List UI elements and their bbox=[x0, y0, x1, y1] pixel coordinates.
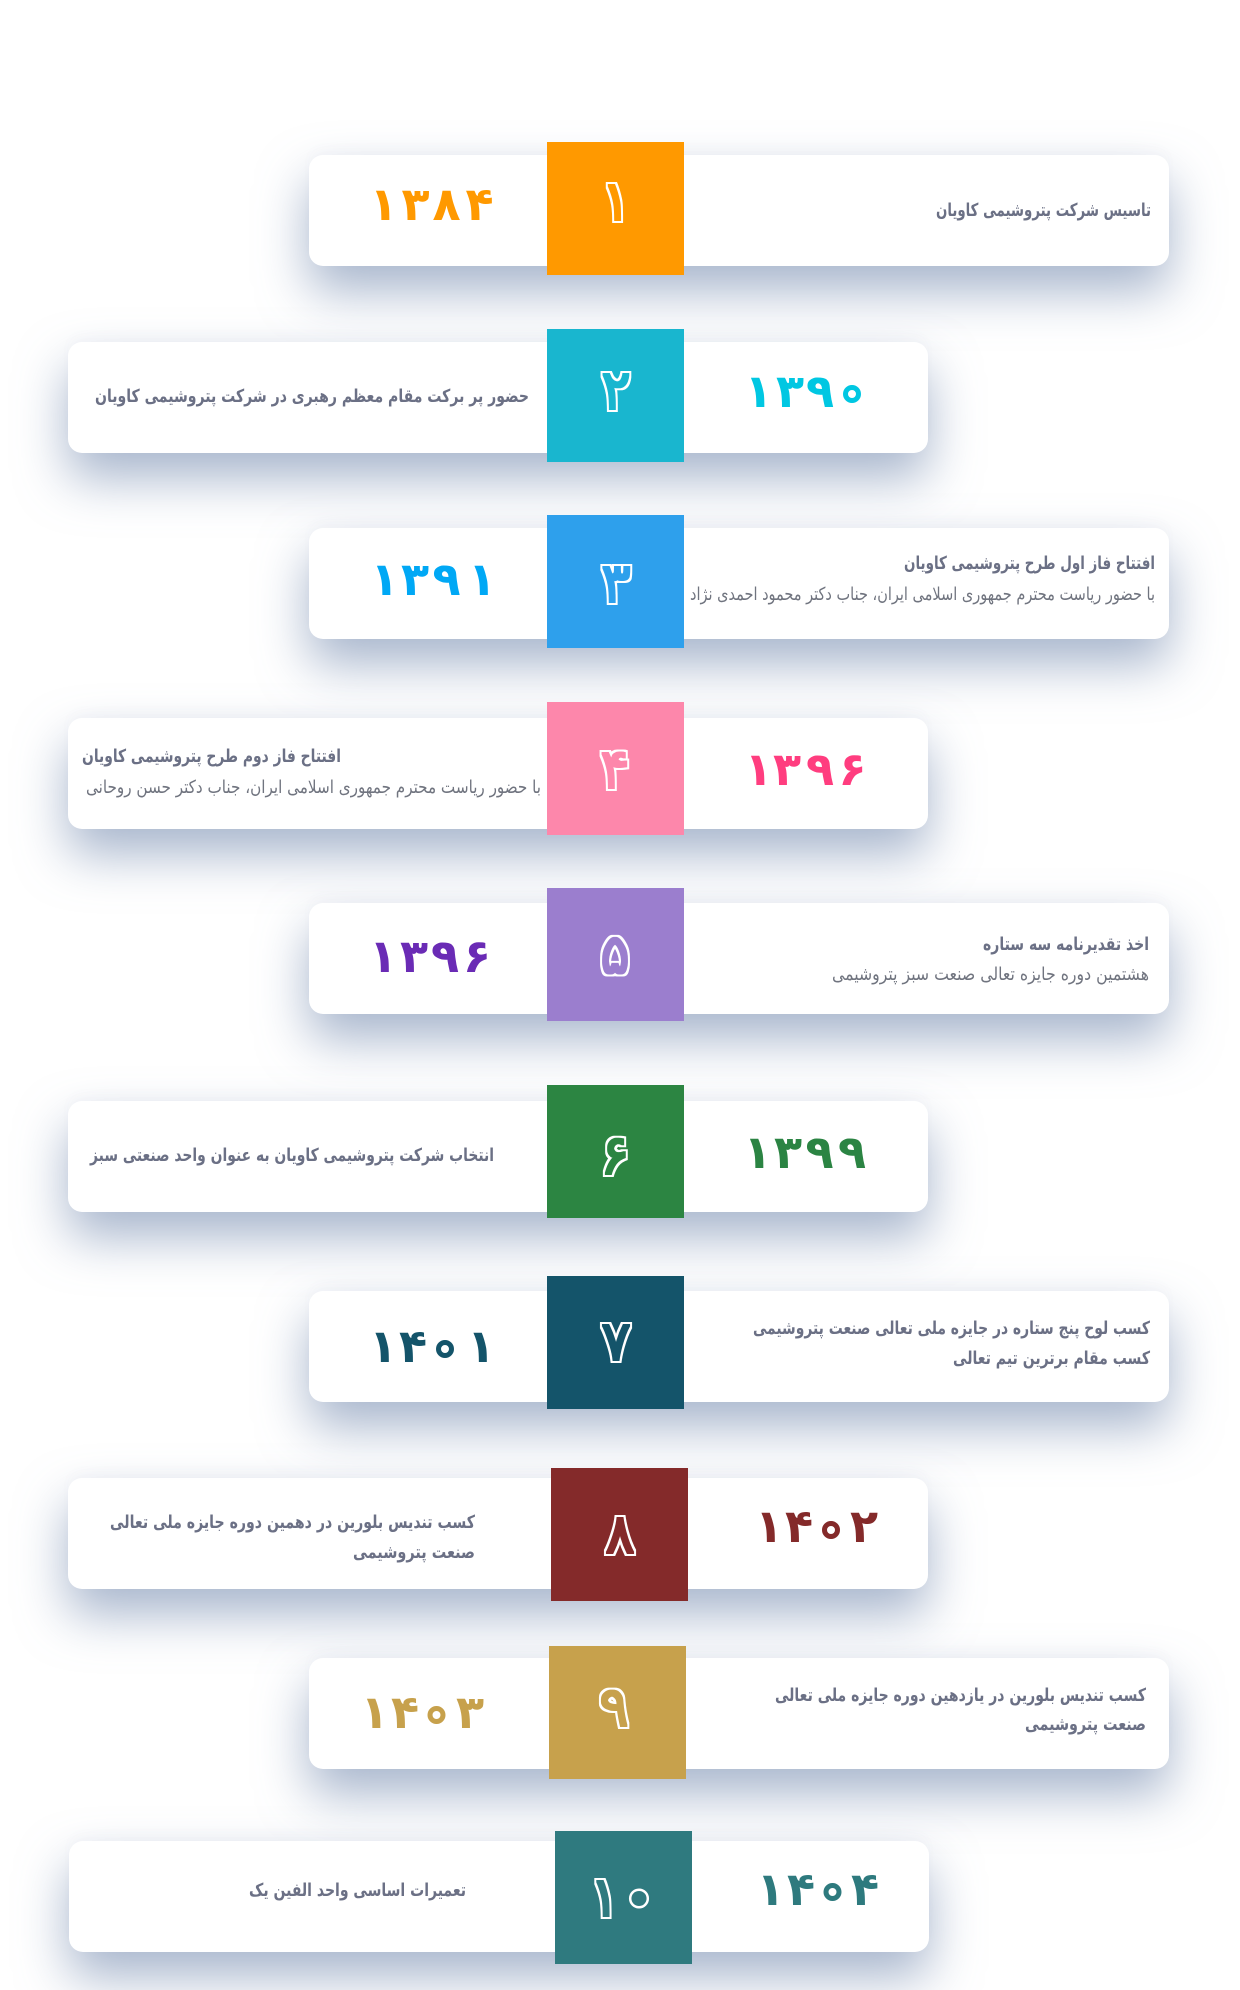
year: ۱۳۸۴ bbox=[369, 177, 494, 231]
outlined number: ۶ bbox=[600, 1123, 630, 1187]
outlined number: ۸ bbox=[605, 1502, 635, 1566]
year: ۱۳۹۶ bbox=[369, 929, 491, 983]
number square bbox=[547, 1085, 684, 1218]
card bbox=[68, 1478, 928, 1589]
row 4: 1396 phase two bbox=[36, 702, 960, 886]
number square bbox=[547, 329, 684, 462]
title: افتتاح فاز دوم طرح پتروشیمی کاویان bbox=[82, 746, 341, 767]
subtitle: هشتمین دوره جایزه تعالی صنعت سبز پتروشیمی bbox=[832, 964, 1149, 985]
number square bbox=[551, 1468, 688, 1601]
row 8: 1402 crystal statue bbox=[36, 1468, 960, 1646]
description: تاسیس شرکت پتروشیمی کاویان bbox=[936, 200, 1151, 221]
line one: کسب تندیس بلورین در دهمین دوره جایزه ملی تعالی bbox=[110, 1512, 475, 1533]
outlined number: ۲ bbox=[601, 358, 631, 422]
card bbox=[309, 1658, 1169, 1769]
outlined number: ۱ bbox=[601, 169, 631, 233]
outlined number: ۳ bbox=[601, 551, 631, 615]
line two: صنعت پتروشیمی bbox=[1025, 1714, 1146, 1735]
year: ۱۴۰۳ bbox=[360, 1685, 484, 1739]
number square bbox=[547, 515, 684, 648]
number square bbox=[549, 1646, 686, 1779]
card bbox=[309, 1291, 1169, 1402]
title: افتتاح فاز اول طرح پتروشیمی کاویان bbox=[904, 553, 1155, 574]
card bbox=[309, 528, 1169, 639]
card bbox=[68, 1101, 928, 1212]
row 10: 1404 overhaul bbox=[37, 1831, 961, 1990]
row 6: 1399 green unit bbox=[36, 1085, 960, 1269]
year: ۱۳۹۰ bbox=[744, 364, 866, 418]
year: ۱۴۰۴ bbox=[756, 1862, 879, 1916]
row 9: 1403 crystal statue bbox=[277, 1646, 1201, 1826]
row 5: 1396 three star bbox=[277, 888, 1201, 1071]
number square bbox=[555, 1831, 692, 1964]
number square bbox=[547, 1276, 684, 1409]
subtitle: با حضور ریاست محترم جمهوری اسلامی ایران، جناب دکتر حسن روحانی bbox=[86, 777, 541, 798]
card bbox=[68, 342, 928, 453]
number square bbox=[547, 888, 684, 1021]
year: ۱۳۹۶ bbox=[744, 742, 867, 796]
outlined number: ۴ bbox=[600, 737, 630, 801]
card bbox=[309, 903, 1169, 1014]
number square bbox=[547, 702, 684, 835]
outlined number: ۹ bbox=[599, 1675, 629, 1739]
title: اخذ تقدیرنامه سه ستاره bbox=[983, 934, 1149, 955]
year: ۱۳۹۱ bbox=[370, 552, 496, 606]
row 1: 1384 founding bbox=[277, 142, 1201, 323]
description: انتخاب شرکت پتروشیمی کاویان به عنوان واحد صنعتی سبز bbox=[89, 1145, 494, 1166]
line two: صنعت پتروشیمی bbox=[353, 1542, 475, 1563]
description: تعمیرات اساسی واحد الفین یک bbox=[249, 1880, 466, 1901]
year: ۱۳۹۹ bbox=[743, 1125, 866, 1179]
card bbox=[69, 1841, 929, 1952]
outlined number: ۷ bbox=[601, 1309, 631, 1373]
outlined number: ۱۰ bbox=[590, 1865, 654, 1929]
line one: کسب تندیس بلورین در یازدهین دوره جایزه ملی تعالی bbox=[775, 1685, 1146, 1706]
year: ۱۴۰۱ bbox=[369, 1319, 495, 1373]
outlined number: ۵ bbox=[600, 922, 630, 986]
row 2: 1390 leader visit bbox=[36, 329, 960, 510]
description: حضور پر برکت مقام معظم رهبری در شرکت پتروشیمی کاویان bbox=[95, 386, 529, 407]
year: ۱۴۰۲ bbox=[755, 1499, 878, 1553]
card bbox=[309, 155, 1169, 266]
row 7: 1401 five star bbox=[277, 1276, 1201, 1459]
number square bbox=[547, 142, 684, 275]
card bbox=[68, 718, 928, 829]
line two: کسب مقام برترین تیم تعالی bbox=[953, 1348, 1150, 1369]
row 3: 1391 phase one bbox=[277, 515, 1201, 696]
